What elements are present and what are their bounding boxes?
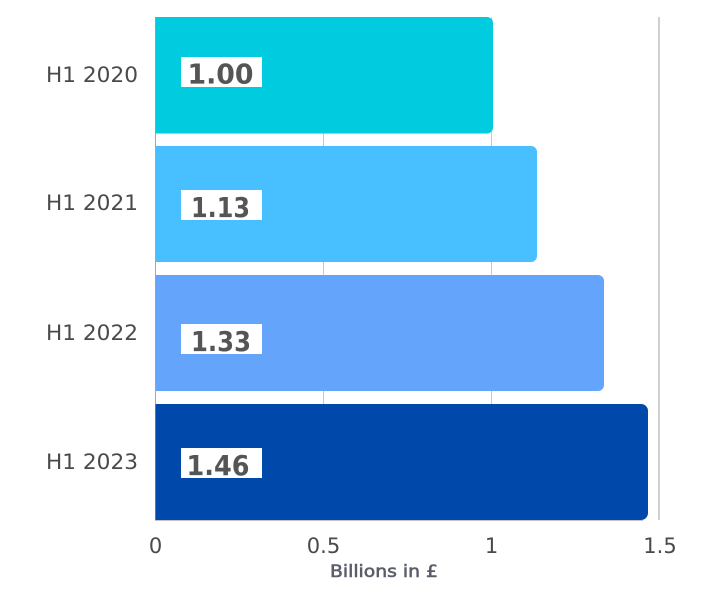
category axis labels: H1 2021 bbox=[46, 191, 138, 215]
value axis labels: 1.5 bbox=[643, 534, 677, 558]
value axis labels bbox=[149, 534, 677, 558]
bar: H1 2021 bbox=[156, 146, 537, 262]
value label: 1.00: 1.00 bbox=[188, 58, 254, 90]
value axis labels: 1 bbox=[485, 534, 498, 558]
value axis labels: 0 bbox=[149, 534, 162, 558]
value label: 1.13: 1.13 bbox=[191, 191, 250, 224]
bar: H1 2020 bbox=[156, 17, 493, 134]
category axis labels: H1 2020 bbox=[46, 63, 138, 87]
category axis labels bbox=[46, 63, 138, 474]
value axis labels: 0.5 bbox=[307, 534, 340, 558]
axis title: Billions in £ bbox=[330, 562, 438, 582]
bar: H1 2023 bbox=[156, 404, 648, 520]
bar: H1 2022 bbox=[156, 275, 604, 391]
category axis labels: H1 2023 bbox=[46, 450, 138, 474]
value label: 1.46: 1.46 bbox=[186, 449, 250, 482]
category axis labels: H1 2022 bbox=[46, 321, 138, 345]
value label: 1.33: 1.33 bbox=[191, 325, 251, 358]
